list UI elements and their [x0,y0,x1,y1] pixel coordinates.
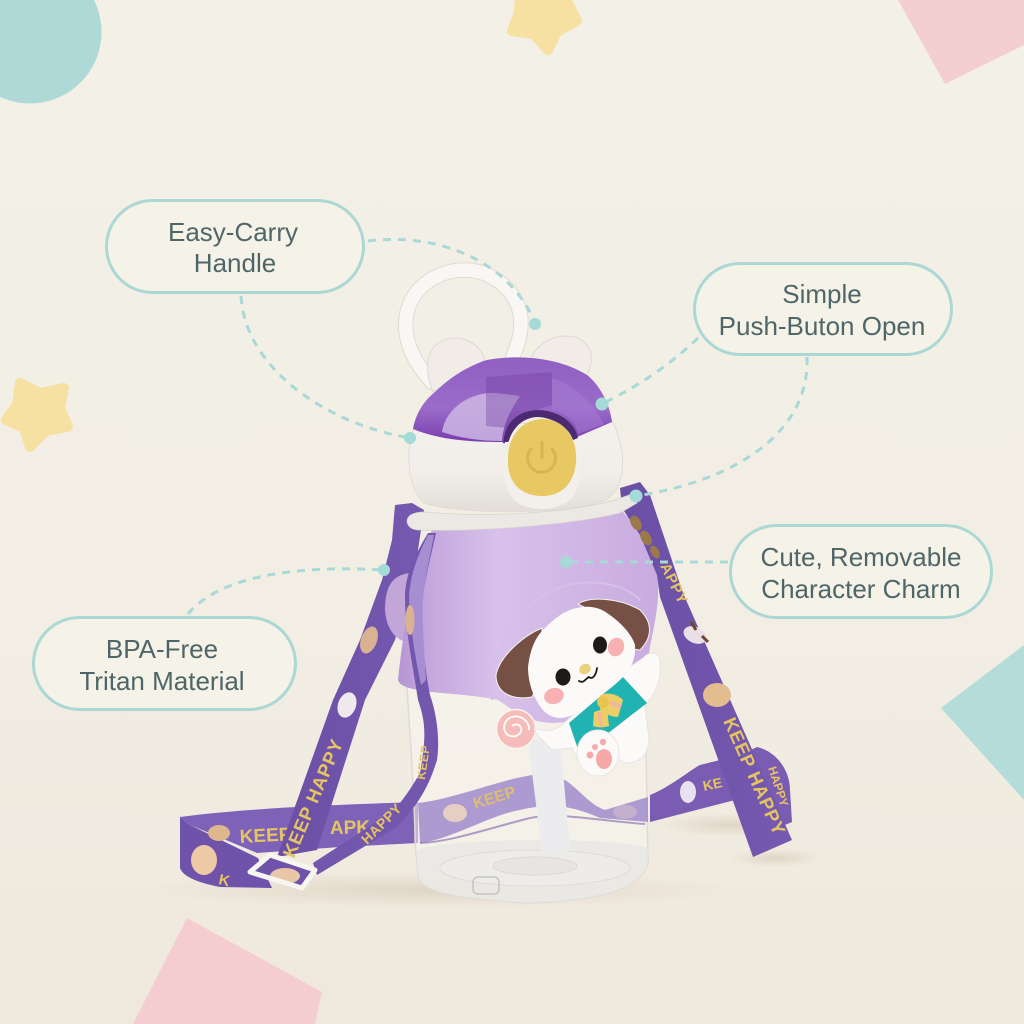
dashed connector lines [188,239,807,614]
button collar [504,440,580,509]
dome highlight [442,393,520,441]
bear prints [208,825,230,841]
paw [577,730,619,776]
bear print: inner strap [406,605,414,635]
lollipop stick [530,728,555,742]
body and arms [534,653,660,773]
bear print: left strap upper [334,690,360,720]
dome arc shadow [503,410,578,444]
transparent purple dome [413,357,612,442]
callout: easy-carry handle: Handle [194,248,276,278]
strap ring band [407,494,637,530]
callout: push-button open: Push-Buton Open [719,311,925,341]
front fold of left loop [180,817,272,888]
buckle [250,855,315,888]
right shoulder strap [620,482,792,857]
yellow push button [508,419,576,496]
decorative top star [512,0,577,50]
decorative left star [6,383,68,447]
back band of left loop [180,802,418,853]
callout: easy-carry handle [106,200,364,292]
callout: removable character charm: Cute, Removable [761,542,961,572]
connector dots [378,318,642,576]
strap text: keep happy lower right: KEEP HAPPY [719,714,790,839]
strap prints upper [628,514,662,560]
straw [528,737,570,854]
bottle floor [416,840,648,903]
strap text: through bottle: KEEP [471,784,518,813]
bear print: lower [703,683,731,707]
callout: removable character charm [730,526,992,618]
lid and cap [406,270,637,530]
head [528,607,635,718]
purple body sleeve [398,508,658,723]
right ear [578,599,649,650]
neck strap loop behind the bottle: K [217,871,231,890]
cheeks [605,635,627,659]
character charm [496,599,660,776]
callout: bpa-free tritan material [34,618,296,710]
bear print: upper [681,623,709,647]
white lid base [409,420,623,512]
nose [577,662,593,676]
strap text: keep happy lower left: KEEP HAPPY [278,736,347,861]
callout: bpa-free tritan material: Tritan Material [79,666,245,696]
dome right highlight [552,378,604,434]
rear right band [650,747,792,832]
neck strap loop behind the bottle [180,747,792,890]
strap text: reversed: APK [330,817,370,839]
right ear [531,336,591,378]
side lobe [385,573,412,642]
yellow bow [593,694,623,728]
eyes [593,636,607,654]
left ear [496,628,542,698]
decorative teal circle [0,0,102,104]
ground shadow [140,813,820,908]
decorative teal square [941,645,1024,800]
decorative pink square [133,918,322,1024]
lollipop [496,710,536,748]
strap text: rear: KE [701,774,724,794]
callout: bpa-free tritan material: BPA-Free [106,634,218,664]
strap text: inner strap upper: KEEP [414,744,433,780]
mouth [579,668,597,682]
inner left strap [313,533,438,875]
callout: removable character charm: Character Charm [761,574,961,604]
dome inner window [486,372,552,428]
clear bottle body [407,686,648,903]
icon: power symbol [528,448,556,472]
left ear [428,338,485,392]
left shoulder strap, behind the sleeve [277,503,424,861]
callout: push-button open: Simple [782,279,862,309]
decorative pink corner shape [898,0,1024,84]
teal vest [569,677,647,755]
carry handle [406,270,521,382]
strap text: keep happy inner strap: HAPPY [358,800,405,847]
strap text: happy upper right: APPY [656,560,691,607]
callout: easy-carry handle: Easy-Carry [168,217,298,247]
strap text: keep left: KEEP [239,824,292,848]
callout: push-button open [694,264,952,354]
ribbon seen through the bottle [418,775,648,843]
strap text: rear right: HAPPY [765,765,791,808]
bear print: left strap middle [357,624,381,656]
